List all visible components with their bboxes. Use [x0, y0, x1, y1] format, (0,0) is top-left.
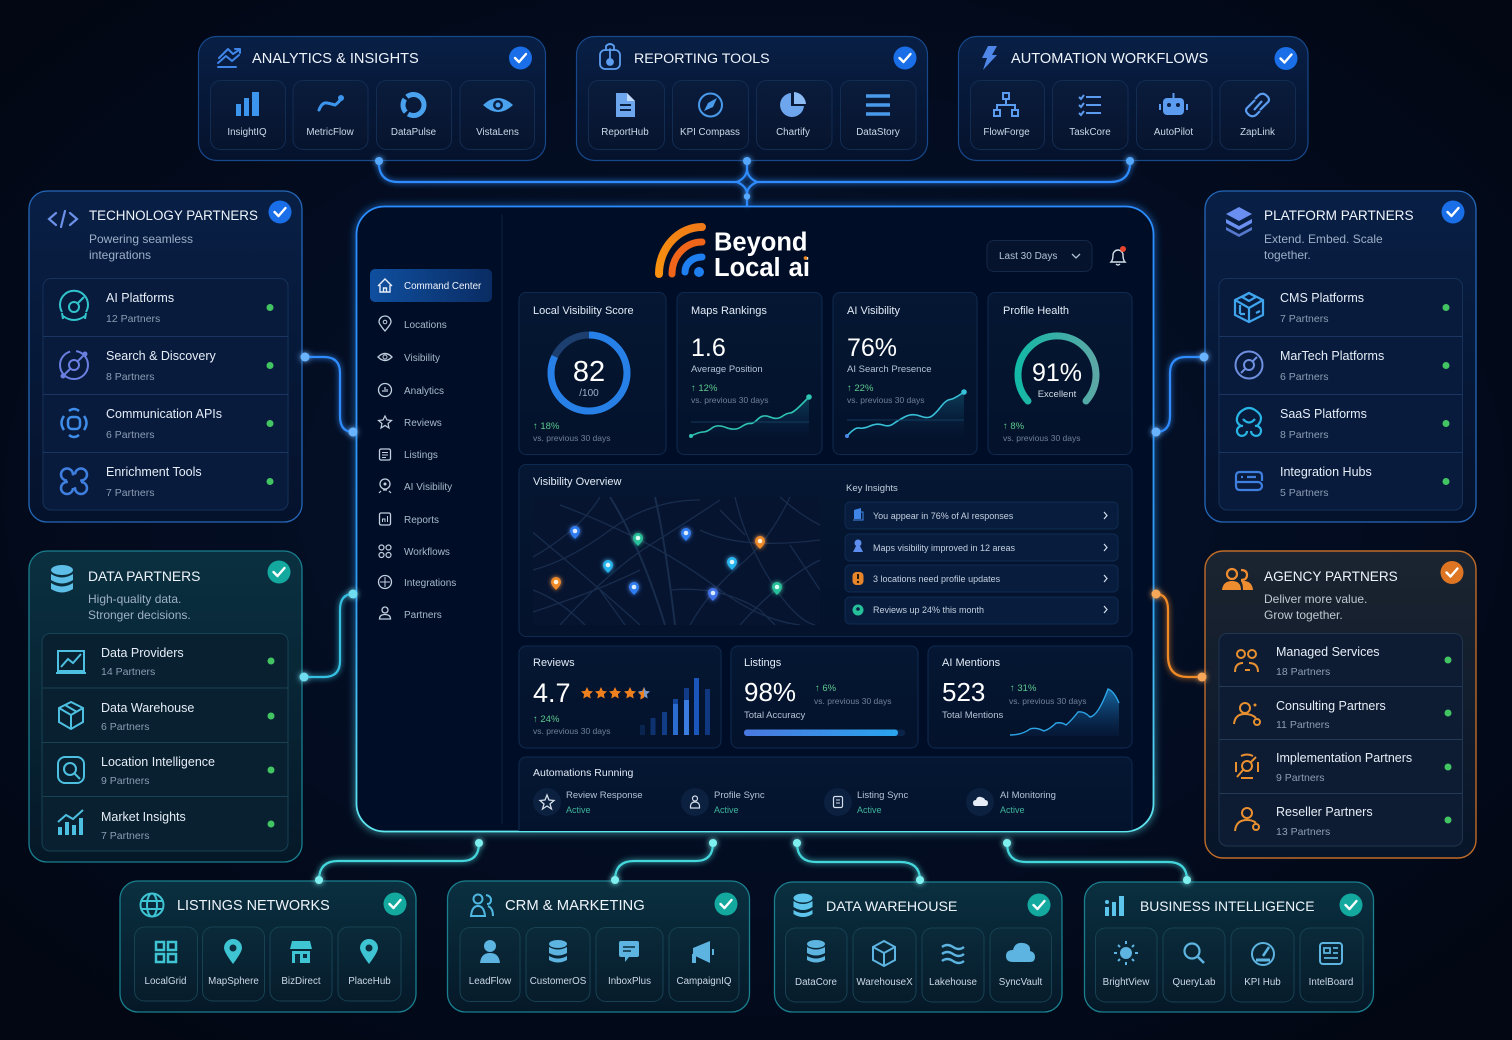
row: AI Platforms: AI Platforms — [106, 291, 174, 305]
card: reviews: Reviews — [533, 657, 575, 669]
heading: CRM & MARKETING — [505, 898, 645, 914]
row: Integration Hubs: 5 Partners — [1280, 487, 1328, 499]
tool: Chartify — [756, 80, 832, 150]
row: Integration Hubs: Integration Hubs — [1280, 465, 1372, 479]
heading: PLATFORM PARTNERS — [1264, 208, 1414, 223]
nav item: Command Center (active) — [370, 269, 492, 302]
nav item: Analytics: Analytics — [404, 386, 444, 397]
gauge: 82 of 100: 82 — [573, 356, 605, 388]
connectors: bottom panels to dashboard — [315, 839, 1191, 884]
card: ai visibility — [833, 292, 977, 454]
panel: platform partners — [1205, 191, 1476, 522]
row: Managed Services: Managed Services — [1276, 645, 1380, 659]
description: Grow together. — [1264, 608, 1343, 622]
tool: LocalGrid: LocalGrid — [145, 976, 186, 987]
tool: KPI Hub — [1231, 928, 1294, 1002]
automation: Review Response — [533, 788, 643, 816]
card: local visibility score: vs. previous 30 days — [533, 433, 610, 443]
card: ai visibility: 76% — [847, 334, 897, 362]
nav item: Locations — [379, 316, 447, 331]
tool: PlaceHub: PlaceHub — [348, 976, 391, 987]
nav item: Partners: Partners — [404, 610, 442, 621]
tool: BrightView: BrightView — [1103, 977, 1150, 988]
card: local visibility score: ↑ 18% — [533, 421, 560, 432]
card: maps rankings — [677, 292, 822, 454]
nav item: Reviews: Reviews — [404, 418, 442, 429]
area chart — [1010, 689, 1119, 736]
row: MarTech Platforms: 6 Partners — [1280, 371, 1328, 383]
heading: TECHNOLOGY PARTNERS — [89, 208, 258, 223]
row: Implementation Partners — [1236, 751, 1452, 784]
insight row — [845, 597, 1118, 624]
panel: agency partners — [1205, 551, 1476, 858]
row: Data Providers — [56, 646, 274, 678]
row: Data Providers: 14 Partners — [101, 666, 155, 678]
card: maps rankings: Average Position — [691, 364, 763, 375]
nav item: Analytics — [378, 384, 444, 397]
card: listings: ↑ 6% — [815, 683, 837, 694]
card: ai mentions: Total Mentions — [942, 710, 1004, 721]
card: ai mentions — [928, 646, 1132, 748]
check badge — [268, 560, 290, 584]
tool: DataStory: DataStory — [856, 127, 900, 138]
sparkline — [689, 394, 812, 440]
icon: lightning bolt — [982, 46, 997, 70]
tool: ZapLink — [1220, 80, 1296, 150]
row: Integration Hubs — [1236, 465, 1450, 499]
logo: Beyond Local ai: Beyond — [714, 228, 808, 256]
row: Consulting Partners — [1234, 699, 1452, 731]
tool: CustomerOS — [526, 928, 590, 1002]
icon: layers — [1226, 207, 1252, 237]
row: Search & Discovery: Search & Discovery — [106, 349, 217, 363]
row: Data Warehouse: 6 Partners — [101, 721, 149, 733]
description: Deliver more value. — [1264, 592, 1367, 606]
check badge — [1274, 47, 1298, 70]
check badge — [894, 46, 916, 70]
card: listings: Total Accuracy — [744, 710, 805, 721]
category list — [1219, 634, 1462, 846]
row: CMS Platforms: CMS Platforms — [1280, 291, 1364, 305]
card: maps rankings: 1.6 — [691, 334, 726, 362]
gauge: 82 of 100: /100 — [579, 388, 599, 399]
insight row — [845, 534, 1118, 561]
row: Data Warehouse: Data Warehouse — [101, 701, 194, 715]
card: listings: 98% — [744, 677, 796, 707]
tool: DataStory — [840, 80, 916, 150]
tool: DataPulse — [376, 80, 452, 150]
tool: KPI Hub: KPI Hub — [1244, 977, 1281, 988]
row: Location Intelligence: Location Intelligence — [101, 755, 215, 769]
nav item: Command Center (active): Command Center — [404, 281, 482, 292]
panel: technology partners — [29, 191, 302, 522]
heading: LISTINGS NETWORKS — [177, 898, 330, 914]
card: ai mentions: vs. previous 30 days — [1009, 696, 1086, 706]
row: Market Insights: 7 Partners — [101, 830, 149, 842]
tool: QueryLab — [1163, 928, 1225, 1002]
tool: LocalGrid — [134, 927, 198, 1001]
panel: visibility overview — [519, 464, 1132, 636]
nav item: Visibility: Visibility — [404, 353, 440, 364]
row: Data Providers: Data Providers — [101, 646, 184, 660]
gauge: 82 of 100 — [551, 335, 627, 411]
row: Enrichment Tools — [61, 465, 274, 499]
row: CMS Platforms: 7 Partners — [1280, 313, 1328, 325]
tool: VistaLens — [460, 80, 534, 150]
panel: business intelligence — [1084, 882, 1374, 1012]
connector: agency partners — [1152, 590, 1206, 682]
key insights list — [845, 483, 1118, 624]
row: SaaS Platforms: 8 Partners — [1280, 429, 1328, 441]
check badge — [268, 200, 292, 224]
tool: BizDirect — [270, 927, 332, 1001]
nav item: Listings: Listings — [404, 450, 438, 461]
nav item: AI Visibility — [379, 479, 452, 493]
automation: AI Monitoring: Active — [1000, 805, 1025, 815]
icon: globe — [140, 894, 164, 916]
icon: people — [471, 894, 493, 916]
heading: AUTOMATION WORKFLOWS — [1011, 51, 1209, 67]
nav item: Visibility — [378, 353, 440, 364]
row: Reseller Partners — [1235, 805, 1452, 838]
card: reviews: vs. previous 30 days — [533, 726, 610, 736]
nav item: AI Visibility: AI Visibility — [404, 482, 452, 493]
tool: InboxPlus — [596, 928, 663, 1002]
tool: Lakehouse — [922, 928, 984, 1002]
description: Extend. Embed. Scale — [1264, 232, 1383, 246]
automation: Profile Sync: Profile Sync — [714, 790, 765, 801]
tool: LeadFlow: LeadFlow — [469, 976, 512, 987]
row: Search & Discovery — [60, 349, 274, 383]
check badge — [1028, 894, 1050, 916]
row: Communication APIs — [62, 407, 274, 441]
panel: reporting tools — [576, 36, 928, 160]
row: CMS Platforms — [1235, 291, 1450, 325]
insight row: Reviews up 24% this month — [873, 605, 984, 615]
connector: technology partners — [300, 352, 358, 436]
row: Reseller Partners: Reseller Partners — [1276, 805, 1373, 819]
map with location pins — [530, 497, 820, 625]
nav item: Integrations — [378, 576, 456, 589]
tool: AutoPilot: AutoPilot — [1154, 127, 1193, 138]
logo: Beyond Local ai — [659, 227, 810, 282]
bar chart — [640, 678, 710, 735]
tool: KPI Compass — [672, 80, 748, 150]
description: Powering seamless — [89, 232, 193, 246]
card: profile health: vs. previous 30 days — [1003, 433, 1080, 443]
tool: FlowForge: FlowForge — [983, 127, 1030, 138]
tool: SyncVault: SyncVault — [999, 977, 1042, 988]
tool: ReportHub: ReportHub — [601, 127, 649, 138]
row: Data Warehouse — [59, 701, 274, 733]
key insights list: Key Insights — [846, 483, 898, 494]
tool: CampaignIQ — [669, 928, 739, 1002]
description: Stronger decisions. — [88, 608, 191, 622]
logo: Beyond Local ai: Local ai — [714, 254, 810, 282]
automation: Listing Sync: Listing Sync — [857, 790, 908, 801]
automation: Listing Sync — [824, 788, 908, 816]
heading: DATA WAREHOUSE — [826, 899, 957, 915]
card: listings — [731, 646, 918, 748]
connector: data partners — [300, 590, 358, 682]
icon: analytics trend — [218, 49, 240, 67]
tool: BizDirect: BizDirect — [281, 976, 321, 987]
row: Implementation Partners: 9 Partners — [1276, 772, 1324, 784]
heading: REPORTING TOOLS — [634, 51, 770, 67]
insight row: Maps visibility improved in 12 areas — [873, 543, 1016, 553]
automation: Review Response: Active — [566, 805, 591, 815]
heading: AGENCY PARTNERS — [1264, 569, 1398, 584]
heading: DATA PARTNERS — [88, 568, 200, 584]
panel: visibility overview: Visibility Overview — [533, 476, 621, 488]
tool: DataCore — [786, 928, 847, 1002]
row: AI Platforms: 12 Partners — [106, 313, 160, 325]
card: profile health — [988, 292, 1132, 454]
card: ai visibility: AI Search Presence — [847, 364, 932, 375]
insight row — [845, 565, 1118, 592]
heading: BUSINESS INTELLIGENCE — [1140, 898, 1314, 914]
icon: bar chart — [1105, 896, 1124, 916]
tool: InboxPlus: InboxPlus — [608, 976, 651, 987]
panel: listings networks — [120, 881, 416, 1012]
pins — [551, 526, 782, 601]
automation: Profile Sync: Active — [714, 805, 739, 815]
tool: FlowForge — [970, 80, 1044, 150]
card: ai visibility: ↑ 22% — [847, 383, 874, 394]
automation: AI Monitoring: AI Monitoring — [1000, 790, 1056, 801]
tool: WarehouseX — [853, 928, 916, 1002]
nav item: Workflows — [379, 545, 450, 558]
panel: central dashboard — [356, 206, 1154, 847]
tool: CampaignIQ: CampaignIQ — [676, 976, 732, 987]
nav item: Listings — [380, 449, 438, 461]
panel: automation workflows — [958, 36, 1308, 160]
row: Reseller Partners: 13 Partners — [1276, 826, 1330, 838]
description: integrations — [89, 248, 151, 262]
row: Location Intelligence — [58, 755, 274, 787]
card: local visibility score: Local Visibility Score — [533, 305, 634, 317]
row: Market Insights: Market Insights — [101, 810, 186, 824]
row: Managed Services — [1235, 645, 1452, 678]
check badge — [1442, 200, 1464, 224]
card: profile health: Excellent — [1038, 389, 1077, 400]
panel: automations running — [518, 756, 1132, 831]
card: ai mentions: 523 — [942, 677, 985, 707]
tool: LeadFlow — [460, 928, 520, 1002]
tool: IntelBoard — [1300, 928, 1363, 1002]
check badge — [1440, 561, 1464, 584]
tool: MetricFlow: MetricFlow — [306, 127, 355, 138]
automation: AI Monitoring — [966, 788, 1056, 816]
category list — [43, 278, 288, 510]
insight row: 3 locations need profile updates — [873, 574, 1001, 584]
tool: TaskCore — [1052, 80, 1128, 150]
nav item: Reports — [380, 513, 439, 526]
icon: database — [51, 565, 73, 592]
automation: Listing Sync: Active — [857, 805, 882, 815]
card: listings: Listings — [744, 657, 782, 669]
icon: notification bell — [1111, 246, 1126, 265]
row: Location Intelligence: 9 Partners — [101, 775, 149, 787]
tool: VistaLens: VistaLens — [476, 127, 519, 138]
row: Communication APIs: Communication APIs — [106, 407, 222, 421]
card: profile health: 91% — [1032, 359, 1082, 387]
icon: code brackets — [49, 211, 77, 227]
insight row: You appear in 76% of AI responses — [873, 511, 1014, 521]
tool: InsightIQ: InsightIQ — [227, 127, 267, 138]
row: Communication APIs: 6 Partners — [106, 429, 154, 441]
connectors: top panels to dashboard — [375, 157, 1134, 206]
card: profile health: ↑ 8% — [1003, 421, 1025, 432]
row: Enrichment Tools: 7 Partners — [106, 487, 154, 499]
tool: Lakehouse: Lakehouse — [929, 977, 978, 988]
tool: MapSphere: MapSphere — [208, 976, 259, 987]
date range dropdown — [987, 240, 1092, 272]
row: Managed Services: 18 Partners — [1276, 666, 1330, 678]
date range dropdown: Last 30 Days — [999, 251, 1057, 262]
tool: WarehouseX: WarehouseX — [856, 977, 913, 988]
card: profile health: Profile Health — [1003, 305, 1069, 317]
tool: DataPulse: DataPulse — [391, 127, 437, 138]
star rating — [581, 687, 650, 700]
panel: analytics & insights — [198, 36, 546, 160]
tool: DataCore: DataCore — [795, 977, 838, 988]
tool: PlaceHub — [338, 927, 401, 1001]
category list — [42, 634, 288, 851]
tool: ZapLink: ZapLink — [1240, 127, 1275, 138]
row: SaaS Platforms — [1237, 407, 1450, 441]
panel: data partners — [29, 551, 302, 862]
row: Search & Discovery: 8 Partners — [106, 371, 154, 383]
tool: MetricFlow — [293, 80, 368, 150]
nav item: Partners — [380, 607, 442, 621]
row: MarTech Platforms: MarTech Platforms — [1280, 349, 1384, 363]
panel: crm & marketing — [448, 881, 750, 1012]
automation: Review Response: Review Response — [566, 790, 643, 801]
card: reviews: 4.7 — [533, 678, 571, 708]
card: ai mentions: AI Mentions — [942, 657, 1001, 669]
sidebar — [370, 214, 502, 824]
tool: BrightView — [1096, 928, 1157, 1002]
tool: TaskCore: TaskCore — [1069, 127, 1111, 138]
row: Implementation Partners: Implementation Partners — [1276, 751, 1412, 765]
card: maps rankings: Maps Rankings — [691, 305, 767, 317]
card: ai visibility: vs. previous 30 days — [847, 395, 924, 405]
card: maps rankings: ↑ 12% — [691, 383, 718, 394]
card: ai mentions: ↑ 31% — [1010, 683, 1037, 694]
row: MarTech Platforms — [1236, 349, 1450, 383]
description: together. — [1264, 248, 1311, 262]
description: High-quality data. — [88, 592, 181, 606]
heading: ANALYTICS & INSIGHTS — [252, 51, 419, 67]
tool: CustomerOS: CustomerOS — [530, 976, 587, 987]
card: listings: vs. previous 30 days — [814, 696, 891, 706]
nav item: Workflows: Workflows — [404, 547, 450, 558]
tool: AutoPilot — [1136, 80, 1212, 150]
row: AI Platforms — [60, 291, 274, 325]
tool: Chartify: Chartify — [776, 127, 810, 138]
check badge — [509, 46, 532, 70]
check badge — [714, 892, 738, 916]
row: Consulting Partners: 11 Partners — [1276, 719, 1330, 731]
progress bar — [744, 730, 905, 736]
panel: data warehouse — [774, 882, 1062, 1012]
insight row — [845, 502, 1118, 529]
nav item: Reviews — [378, 416, 442, 429]
card: reviews: ↑ 24% — [533, 714, 560, 725]
automation: Profile Sync — [681, 788, 765, 816]
tool: QueryLab: QueryLab — [1172, 977, 1216, 988]
row: Consulting Partners: Consulting Partners — [1276, 699, 1386, 713]
nav item: Locations: Locations — [404, 320, 447, 331]
sparkline — [845, 389, 967, 440]
panel: automations running: Automations Running — [533, 767, 634, 779]
row: SaaS Platforms: SaaS Platforms — [1280, 407, 1367, 421]
gauge: 91% — [1018, 336, 1096, 401]
tool: SyncVault — [990, 928, 1052, 1002]
icon: reporting — [600, 44, 620, 69]
icon: people — [1227, 569, 1247, 580]
card: ai visibility: AI Visibility — [847, 305, 900, 317]
card: maps rankings: vs. previous 30 days — [691, 395, 768, 405]
row: Enrichment Tools: Enrichment Tools — [106, 465, 202, 479]
check badge — [1340, 894, 1362, 916]
tool: KPI Compass: KPI Compass — [680, 127, 740, 138]
category list — [1219, 278, 1462, 510]
card: reviews — [519, 646, 721, 748]
card: local visibility score — [519, 292, 666, 454]
tool: InsightIQ — [210, 80, 286, 150]
tool: ReportHub — [588, 80, 664, 150]
nav item: Reports: Reports — [404, 515, 439, 526]
check badge — [384, 892, 406, 916]
nav item: Integrations: Integrations — [404, 578, 456, 589]
tool: IntelBoard: IntelBoard — [1309, 977, 1353, 988]
icon: database — [794, 894, 812, 917]
row: Market Insights — [58, 810, 274, 842]
tool: MapSphere — [202, 927, 264, 1001]
connector: platform partners — [1152, 352, 1208, 436]
